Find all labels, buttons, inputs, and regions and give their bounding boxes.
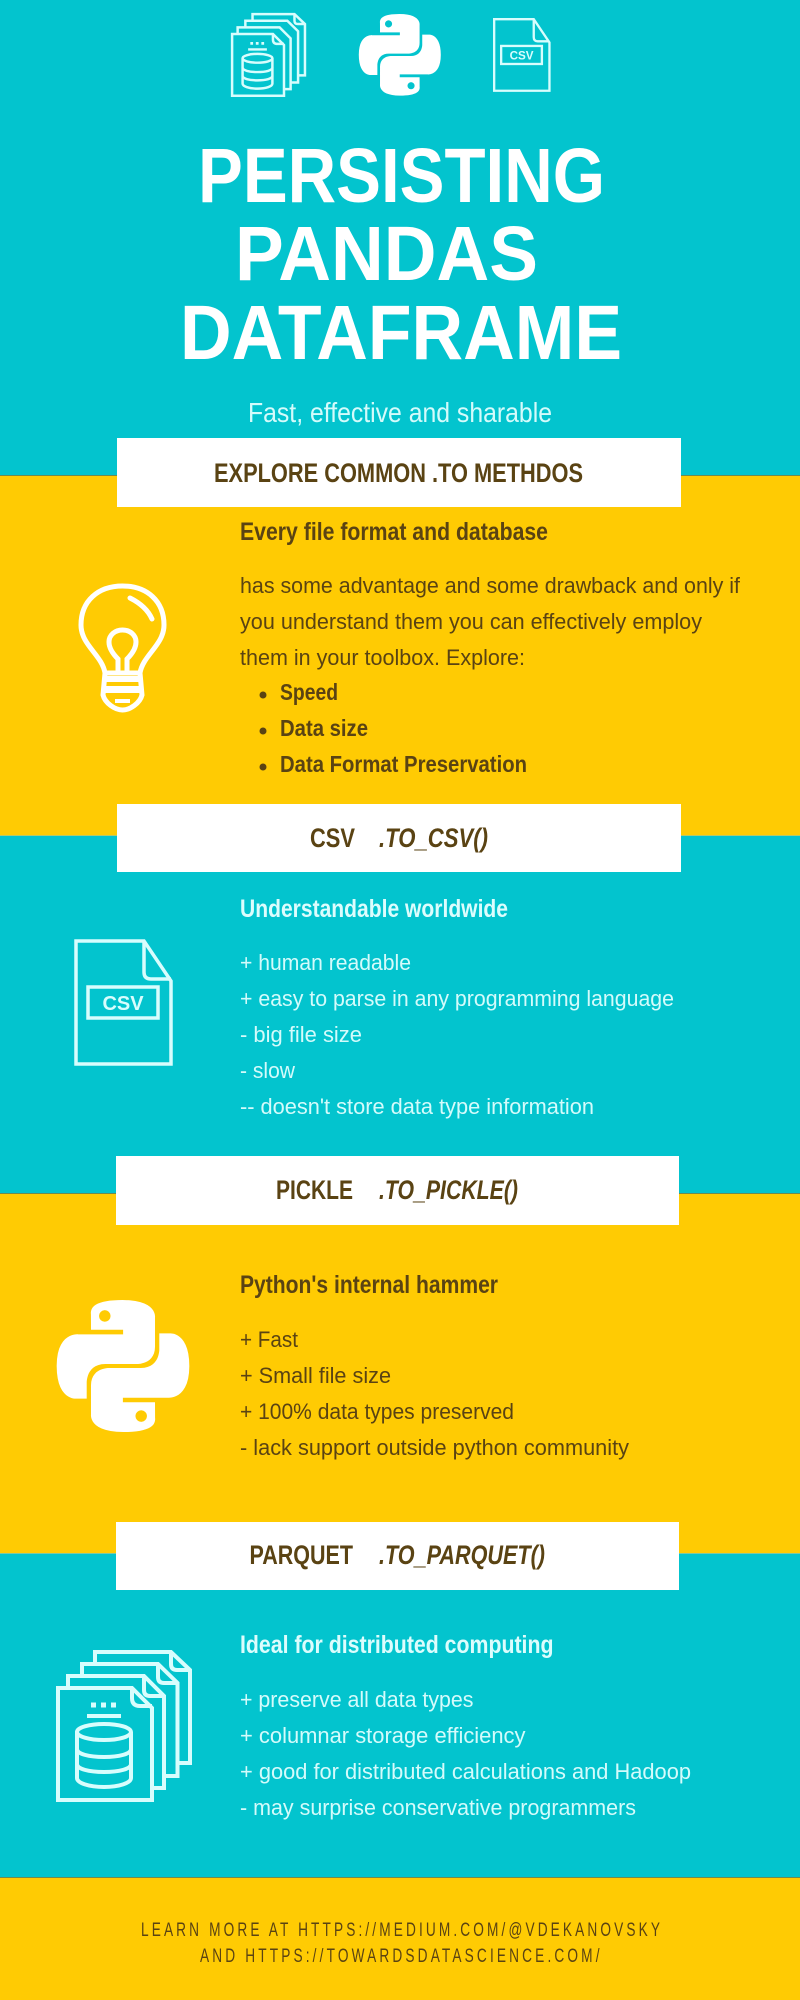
pros and cons list: + columnar storage efficiency	[240, 1723, 526, 1748]
pros and cons list: - slow	[240, 1058, 295, 1083]
panel: pickle	[57, 1271, 629, 1460]
heading: Python's internal hammer	[240, 1271, 498, 1299]
pros and cons list: -- doesn't store data type information	[240, 1094, 594, 1119]
banner: csv: CSV	[310, 823, 355, 853]
pros and cons list: + human readable	[240, 950, 411, 975]
paragraph	[240, 573, 741, 670]
icon: python logo	[359, 14, 441, 96]
banner: csv: .TO_CSV()	[379, 823, 488, 853]
banner: parquet	[116, 1522, 679, 1590]
icon: stacked database files	[58, 1652, 190, 1800]
icon: csv file: CSV	[510, 49, 534, 62]
heading: Ideal for distributed computing	[240, 1631, 554, 1659]
bullet list: Speed	[280, 679, 338, 705]
pros and cons list	[240, 1687, 691, 1820]
paragraph: them in your toolbox. Explore:	[240, 645, 525, 670]
banner: pickle: PICKLE	[276, 1175, 353, 1205]
title: DATAFRAME	[180, 290, 622, 376]
pros and cons list: + 100% data types preserved	[240, 1399, 514, 1424]
banner: explore common methods: EXPLORE COMMON .TO METHDOS	[214, 458, 583, 488]
icon: csv file: CSV	[102, 993, 144, 1015]
pros and cons list: + preserve all data types	[240, 1687, 474, 1712]
heading: Understandable worldwide	[240, 895, 508, 923]
pros and cons list: + easy to parse in any programming language	[240, 986, 674, 1011]
paragraph: has some advantage and some drawback and only if	[240, 573, 741, 598]
title: PANDAS	[235, 211, 538, 297]
pros and cons list: + good for distributed calculations and Hadoop	[240, 1759, 691, 1784]
banner: csv	[117, 804, 681, 872]
footer	[141, 1919, 660, 1967]
paragraph: you understand them you can effectively employ	[240, 609, 702, 634]
panel: parquet	[58, 1631, 691, 1820]
pros and cons list: - may surprise conservative programmers	[240, 1795, 636, 1820]
subtitle: Fast, effective and sharable	[248, 397, 552, 428]
bullet list: Data size	[280, 715, 368, 741]
heading: Every file format and database	[240, 518, 548, 546]
panel: csv	[76, 895, 674, 1119]
icon: python logo	[57, 1300, 189, 1432]
pros and cons list: + Small file size	[240, 1363, 391, 1388]
icon: stacked database files	[232, 14, 305, 96]
icon: light bulb	[81, 586, 164, 710]
panel: header	[180, 14, 622, 428]
banner: parquet: PARQUET	[250, 1540, 353, 1570]
panel: every file format	[81, 518, 741, 777]
bullet list	[260, 679, 527, 777]
banner: pickle: .TO_PICKLE()	[379, 1175, 518, 1205]
footer: AND HTTPS://TOWARDSDATASCIENCE.COM/	[200, 1945, 600, 1967]
banner: parquet: .TO_PARQUET()	[379, 1540, 545, 1570]
title: PERSISTING	[198, 133, 605, 219]
footer: LEARN MORE AT HTTPS://MEDIUM.COM/@VDEKANOVSKY	[141, 1919, 660, 1941]
pros and cons list	[240, 1327, 629, 1460]
bullet list: Data Format Preservation	[280, 751, 527, 777]
pros and cons list: - lack support outside python community	[240, 1435, 629, 1460]
icon: csv file	[76, 941, 171, 1064]
banner: explore common methods	[117, 438, 681, 507]
title	[180, 133, 622, 376]
banner: pickle	[116, 1156, 679, 1225]
icon: csv file	[494, 19, 549, 91]
pros and cons list: - big file size	[240, 1022, 362, 1047]
pros and cons list: + Fast	[240, 1327, 298, 1352]
pros and cons list	[240, 950, 674, 1119]
